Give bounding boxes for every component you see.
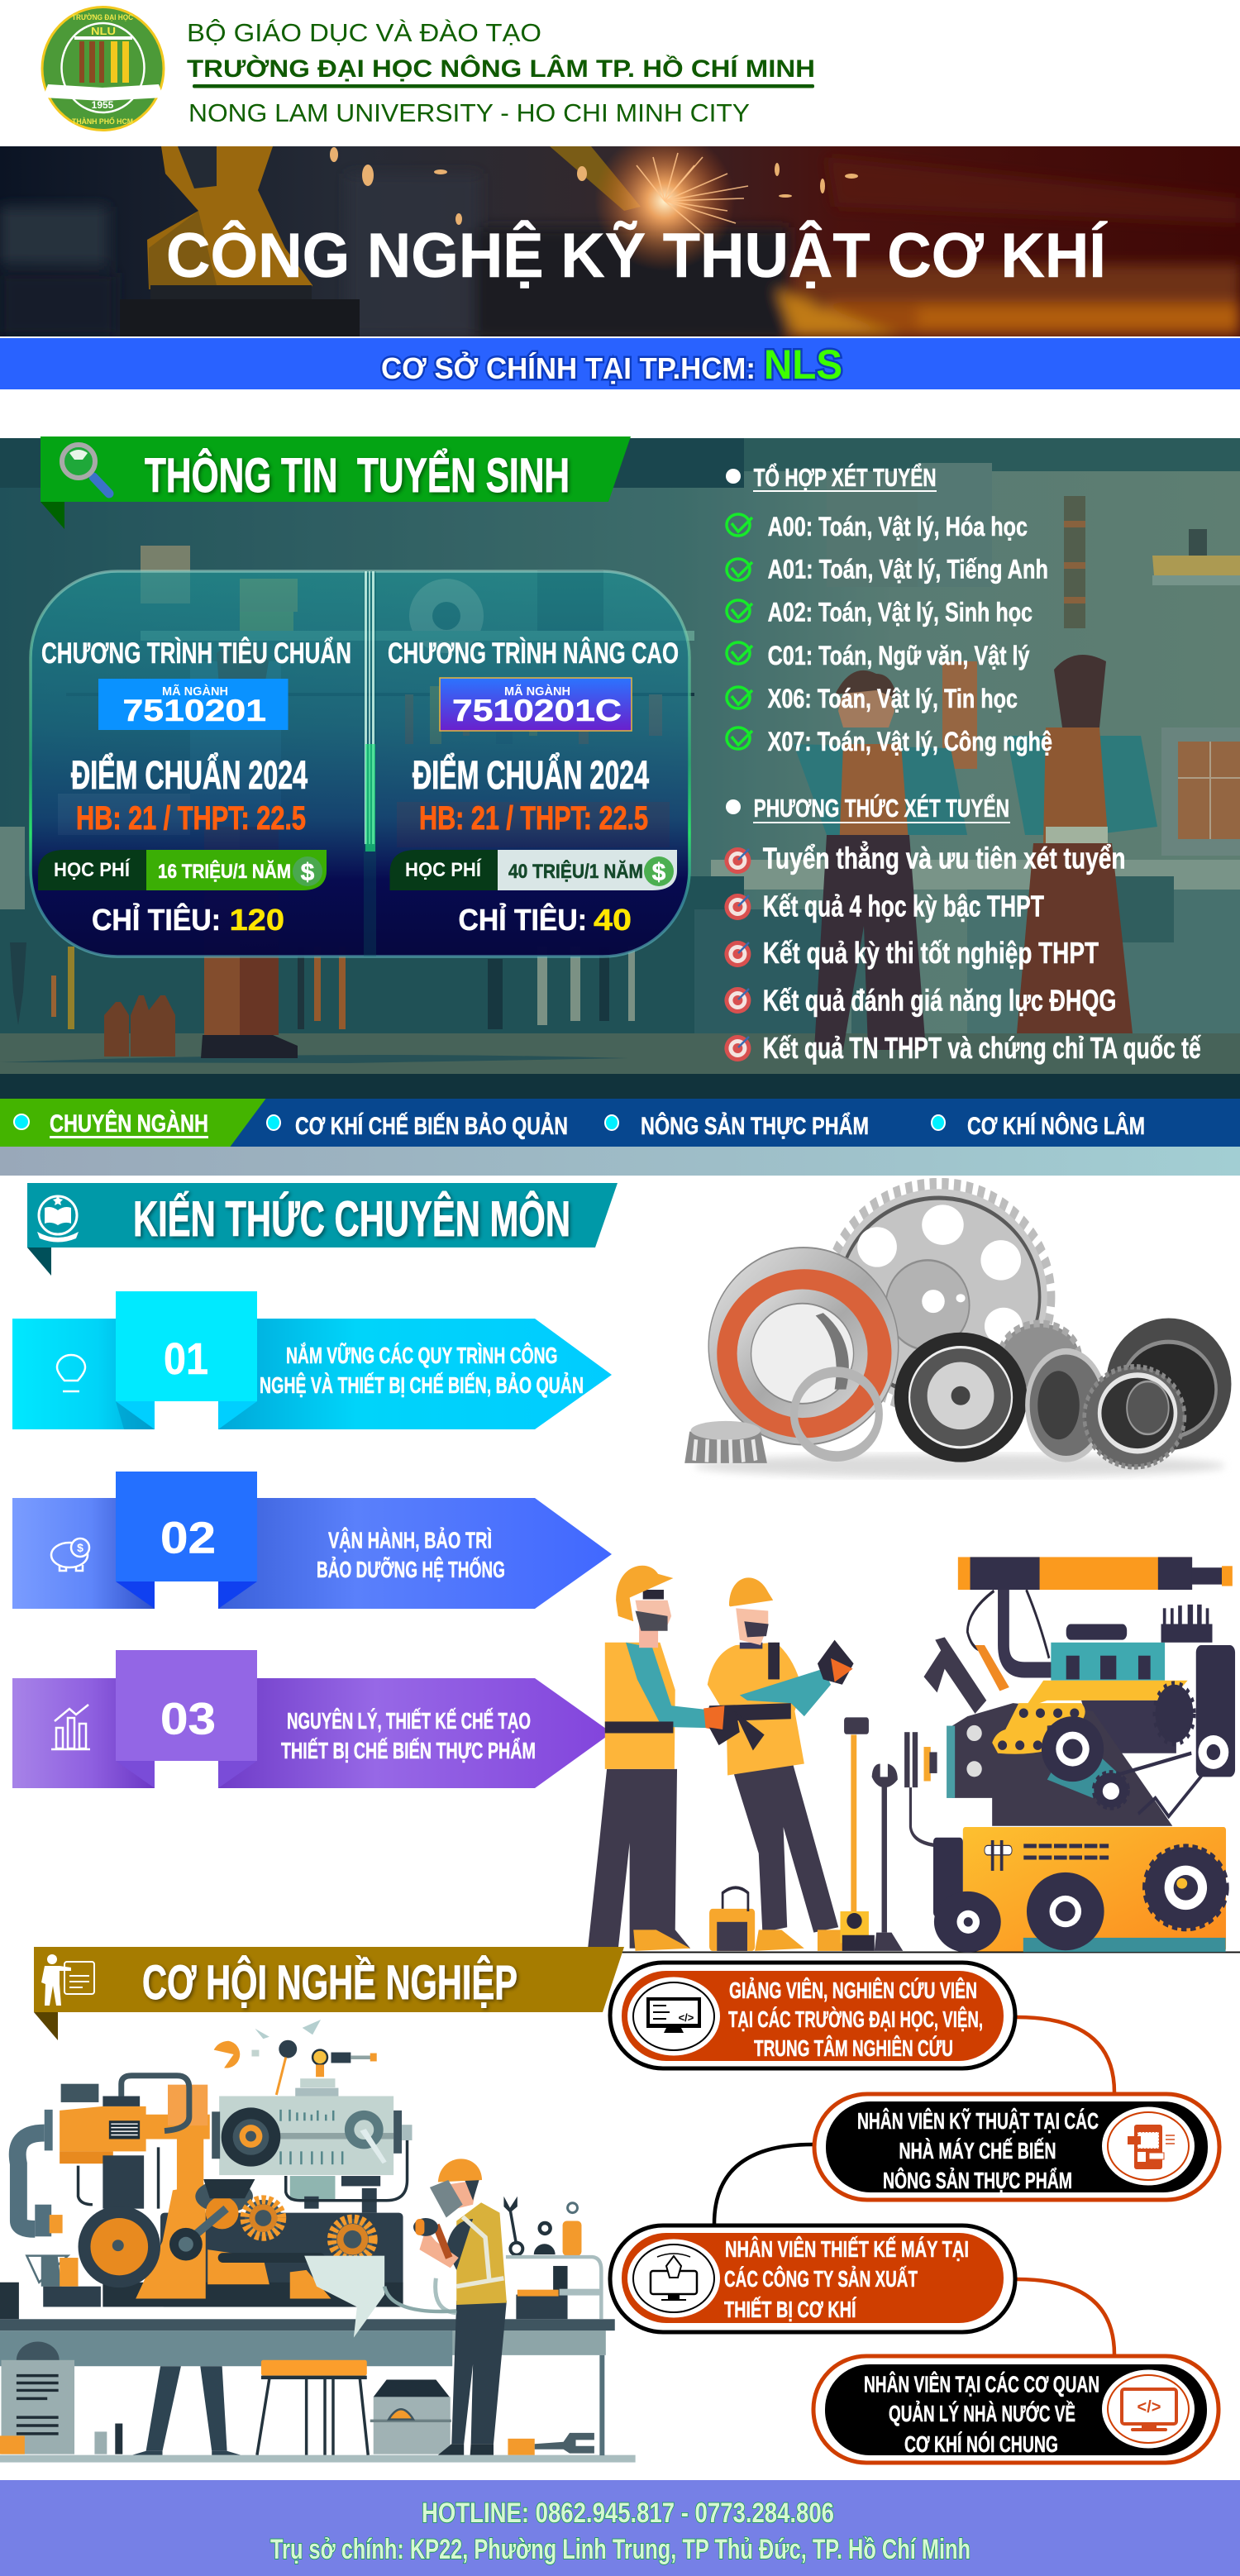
hotline: HOTLINE: 0862.945.817 - 0773.284.806 <box>422 2497 834 2529</box>
worker 2 <box>1007 655 1157 1033</box>
heading: career opportunities: CƠ HỘI NGHỀ NGHIỆP <box>142 1956 517 2010</box>
campus code: NLS <box>764 341 842 388</box>
program code box <box>98 679 288 730</box>
icon: university logo: NLU <box>91 25 116 37</box>
panel: admissions information <box>0 436 1240 1176</box>
taper bearing <box>1085 1367 1185 1467</box>
campus label: CƠ SỞ CHÍNH TẠI TP.HCM: <box>381 351 756 385</box>
combination A01: A01: Toán, Vật lý, Tiếng Anh <box>768 554 1048 584</box>
small rear gear <box>999 1324 1080 1392</box>
pill 2 text <box>857 2108 1099 2193</box>
address: Trụ sở chính: KP22, Phường Linh Trung, TP Thủ Đức, TP. Hồ Chí Minh <box>270 2534 971 2565</box>
floating gauge and parts <box>214 2020 377 2095</box>
machine body <box>17 2076 408 2338</box>
sparks <box>330 146 858 269</box>
item 03 text: THIẾT BỊ CHẾ BIẾN THỰC PHẨM <box>281 1738 536 1763</box>
icon: presenter with board <box>41 1954 94 2006</box>
benchmark scores: HB: 21 / THPT: 22.5 <box>419 800 648 837</box>
section header <box>27 1183 618 1276</box>
pliers and tools <box>10 942 635 1029</box>
connector 1 to 2 <box>1017 2017 1114 2092</box>
illustration: bearings and gears <box>684 1184 1231 1477</box>
specializations bar <box>0 1099 1240 1147</box>
method 4: Kết quả đánh giá năng lực ĐHQG <box>763 983 1116 1017</box>
method 1: Tuyển thẳng và ưu tiên xét tuyển <box>763 841 1126 875</box>
icon: design monitor <box>627 2239 720 2318</box>
banner background shapes <box>0 157 1240 341</box>
tuition pill: $ <box>652 859 666 886</box>
item 02 number: 02 <box>160 1513 216 1562</box>
sleeve <box>1028 1352 1105 1459</box>
icon: open book badge <box>37 1195 79 1242</box>
tuition pill <box>390 850 677 890</box>
item 02 number box <box>116 1472 257 1581</box>
career pill 3 <box>610 2225 1015 2332</box>
method 2 <box>724 890 1044 923</box>
gradient strip <box>0 1147 1240 1176</box>
specialization 1: CƠ KHÍ CHẾ BIẾN BẢO QUẢN <box>295 1112 568 1140</box>
item 01 <box>12 1291 612 1429</box>
program code box <box>440 678 632 731</box>
pill 1 text: TẠI CÁC TRƯỜNG ĐẠI HỌC, VIỆN, <box>728 2006 983 2032</box>
worker bottles <box>104 995 175 1057</box>
campus bar <box>0 338 1240 389</box>
pill 3 text: NHÂN VIÊN THIẾT KẾ MÁY TẠI <box>725 2236 969 2262</box>
tuition pill: 40 TRIỆU/1 NĂM <box>508 860 643 883</box>
icon: university logo <box>41 6 165 131</box>
small ring <box>794 1372 879 1457</box>
item 02 text <box>317 1526 505 1582</box>
program code box: MÃ NGÀNH <box>504 684 570 699</box>
career pill 4 <box>813 2356 1219 2463</box>
pill 4 text: QUẢN LÝ NHÀ NƯỚC VỀ <box>889 2400 1075 2426</box>
glass background <box>31 571 689 956</box>
item 01 text <box>260 1342 584 1398</box>
benchmark heading: ĐIỂM CHUẨN 2024 <box>413 753 649 798</box>
program code box: 7510201 <box>122 694 266 727</box>
quota: CHỈ TIÊU: <box>92 902 221 937</box>
tuition pill <box>38 850 327 890</box>
panel: professional knowledge <box>12 1183 618 1788</box>
icon: university logo: TRƯỜNG ĐẠI HỌC <box>72 12 133 21</box>
tuition pill: 16 TRIỆU/1 NĂM <box>158 860 291 883</box>
combination A02 <box>727 598 1033 627</box>
header: university identity <box>41 6 815 131</box>
tuition pill: HỌC PHÍ <box>405 858 482 881</box>
banner title: CÔNG NGHỆ KỸ THUẬT CƠ KHÍ <box>166 220 1108 291</box>
left small tools <box>0 2256 101 2319</box>
icon: code display <box>1102 2369 1195 2449</box>
item 03 text: NGUYÊN LÝ, THIẾT KẾ CHẾ TẠO <box>287 1708 531 1734</box>
header fold <box>41 502 64 529</box>
item 02 text: VẬN HÀNH, BẢO TRÌ <box>328 1526 492 1553</box>
item 03 number box <box>116 1650 257 1761</box>
footer <box>0 2480 1240 2576</box>
icon: university logo: THÀNH PHỐ HCM <box>72 117 133 126</box>
floor <box>0 2455 636 2463</box>
tuition pill: HỌC PHÍ <box>54 858 131 881</box>
method 2: Kết quả 4 học kỳ bậc THPT <box>763 890 1044 923</box>
item 02 left arm <box>12 1498 155 1609</box>
list: subject combinations <box>726 462 1052 756</box>
orange sealed bearing <box>708 1247 899 1445</box>
item 02 <box>12 1472 612 1609</box>
panel: programs glass card <box>31 571 689 956</box>
pill 3 text: THIẾT BỊ CƠ KHÍ <box>724 2297 856 2322</box>
section header <box>34 1947 624 2040</box>
university name: TRƯỜNG ĐẠI HỌC NÔNG LÂM TP. HỒ CHÍ MINH <box>187 55 815 83</box>
header underline <box>193 84 814 88</box>
quota <box>92 902 284 937</box>
item 03 text <box>281 1708 536 1763</box>
worker left <box>588 1566 740 1951</box>
hand tools on floor <box>709 1717 937 1951</box>
list heading: PHƯƠNG THỨC XÉT TUYỂN <box>754 793 1009 823</box>
item 03 <box>12 1650 612 1788</box>
large timing gear <box>827 1184 1051 1410</box>
control housing <box>212 2078 412 2175</box>
program: advanced <box>388 637 679 937</box>
icon: light bulb <box>57 1355 85 1391</box>
robot arm <box>120 146 641 336</box>
program code box: 7510201C <box>452 694 622 727</box>
benchmark heading: ĐIỂM CHUẨN 2024 <box>71 753 308 798</box>
quota: CHỈ TIÊU: <box>458 902 587 937</box>
taper roller <box>684 1421 767 1463</box>
icon: growth chart <box>51 1705 90 1749</box>
item 03 left arm <box>12 1678 155 1788</box>
illustration: machine workshop <box>0 2020 636 2463</box>
specialization 2 <box>605 1112 869 1140</box>
vented cabinet <box>0 2342 74 2454</box>
hero banner <box>0 131 1240 341</box>
icon: magnifier <box>62 445 109 494</box>
header fold <box>27 1247 51 1276</box>
specialization 3 <box>932 1112 1145 1140</box>
green section header <box>41 436 631 529</box>
item 01 number box <box>116 1291 257 1401</box>
worker right <box>703 1577 854 1951</box>
tag: specializations: CHUYÊN NGÀNH <box>50 1109 208 1138</box>
card divider <box>364 571 376 956</box>
tag: specializations <box>0 1099 266 1147</box>
icon: code monitor <box>627 1977 720 2055</box>
center machine behind glass <box>58 546 694 847</box>
tool box <box>370 2380 451 2454</box>
item 01 number: 01 <box>164 1334 208 1384</box>
pill 4 text <box>864 2371 1099 2457</box>
specialization 1 <box>267 1112 568 1140</box>
method 3: Kết quả kỳ thi tốt nghiệp THPT <box>763 936 1099 970</box>
worker 1 <box>794 670 967 1050</box>
pill 4 text: CƠ KHÍ NÓI CHUNG <box>904 2431 1058 2457</box>
stool <box>257 2360 368 2455</box>
quota: 40 <box>594 903 632 937</box>
small items on floor <box>94 2424 594 2455</box>
program title: CHƯƠNG TRÌNH TIÊU CHUẨN <box>41 637 351 670</box>
icon: code display: </> <box>1137 2398 1161 2416</box>
list heading: TỔ HỢP XÉT TUYỂN <box>754 462 937 492</box>
program code box: MÃ NGÀNH <box>162 684 228 699</box>
list: admission methods <box>724 793 1201 1065</box>
muted tint overlay <box>0 438 1240 1100</box>
worker with welding mask <box>384 2159 507 2455</box>
quota: 120 <box>230 903 284 937</box>
item 02 text: BẢO DƯỠNG HỆ THỐNG <box>317 1556 505 1582</box>
work table <box>0 2319 615 2455</box>
connector 3 to 4 <box>1017 2279 1114 2354</box>
header ribbon <box>41 436 631 502</box>
item 01 arrow <box>218 1319 612 1429</box>
center worker <box>190 642 298 1058</box>
item 03 number: 03 <box>160 1695 216 1744</box>
combination X06: X06: Toán, Vật lý, Tin học <box>768 684 1018 713</box>
benchmark scores: HB: 21 / THPT: 22.5 <box>76 800 306 837</box>
pill 4 text: NHÂN VIÊN TẠI CÁC CƠ QUAN <box>864 2371 1099 2397</box>
method 4 <box>724 983 1116 1017</box>
combination A00: A00: Toán, Vật lý, Hóa học <box>768 512 1028 541</box>
admissions background illustration <box>0 438 1240 1100</box>
black bearing <box>894 1333 1027 1462</box>
ground line <box>588 1952 1240 1953</box>
specialization 3: CƠ KHÍ NÔNG LÂM <box>967 1112 1145 1140</box>
tuition pill: $ <box>301 859 315 886</box>
connector 2 to 3 <box>714 2144 813 2224</box>
program title: CHƯƠNG TRÌNH NÂNG CAO <box>388 637 679 670</box>
engine machine <box>924 1557 1235 1953</box>
illustration: workers and machine <box>588 1557 1240 1953</box>
pill 1 text <box>728 1977 983 2061</box>
ministry name: BỘ GIÁO DỤC VÀ ĐÀO TẠO <box>187 18 541 47</box>
pill 3 text: CÁC CÔNG TY SẢN XUẤT <box>724 2265 918 2292</box>
pill 2 text: NHÂN VIÊN KỸ THUẬT TẠI CÁC <box>857 2108 1099 2134</box>
item 01 text: NGHỆ VÀ THIẾT BỊ CHẾ BIẾN, BẢO QUẢN <box>260 1371 584 1398</box>
bench side tools <box>503 2197 601 2319</box>
specialization 2: NÔNG SẢN THỰC PHẨM <box>641 1112 869 1140</box>
combination A02: A02: Toán, Vật lý, Sinh học <box>768 598 1033 627</box>
combination X07: X07: Toán, Vật lý, Công nghệ <box>768 727 1052 756</box>
panel: career opportunities <box>0 1947 1219 2463</box>
list heading <box>726 462 937 492</box>
pill 1 text: TRUNG TÂM NGHIÊN CỨU <box>754 2035 953 2061</box>
item 03 arrow <box>218 1678 612 1788</box>
pill 1 text: GIẢNG VIÊN, NGHIÊN CỨU VIÊN <box>729 1977 977 2003</box>
header fold <box>34 2012 58 2040</box>
item 01 left arm <box>12 1319 155 1429</box>
english name: NONG LAM UNIVERSITY - HO CHI MINH CITY <box>188 98 750 127</box>
pill 2 text: NHÀ MÁY CHẾ BIẾN <box>899 2138 1056 2163</box>
header ribbon <box>34 1947 624 2012</box>
program: standard <box>38 637 351 937</box>
list heading <box>726 793 1010 823</box>
icon: piggy bank <box>51 1538 89 1571</box>
career pill 2 <box>814 2094 1219 2200</box>
icon: piggy bank: $ <box>77 1541 83 1554</box>
combination X06 <box>727 684 1018 713</box>
item 01 text: NẮM VỮNG CÁC QUY TRÌNH CÔNG <box>286 1342 557 1368</box>
item 02 arrow <box>218 1498 612 1609</box>
icon: orange device <box>1102 2106 1195 2186</box>
icon: university logo: 1955 <box>92 99 114 111</box>
career pill 1 <box>610 1963 1015 2068</box>
combination C01: C01: Toán, Ngữ văn, Vật lý <box>768 641 1030 670</box>
heading: admissions information: THÔNG TIN TUYỂN SINH <box>145 449 570 503</box>
header ribbon <box>27 1183 618 1247</box>
icon: code monitor: </> <box>679 2011 694 2024</box>
dark bearing right <box>1106 1319 1231 1450</box>
pill 2 text: NÔNG SẢN THỰC PHẨM <box>883 2167 1072 2193</box>
pill 3 text <box>724 2236 969 2322</box>
heading: professional knowledge: KIẾN THỨC CHUYÊN MÔN <box>133 1191 570 1247</box>
